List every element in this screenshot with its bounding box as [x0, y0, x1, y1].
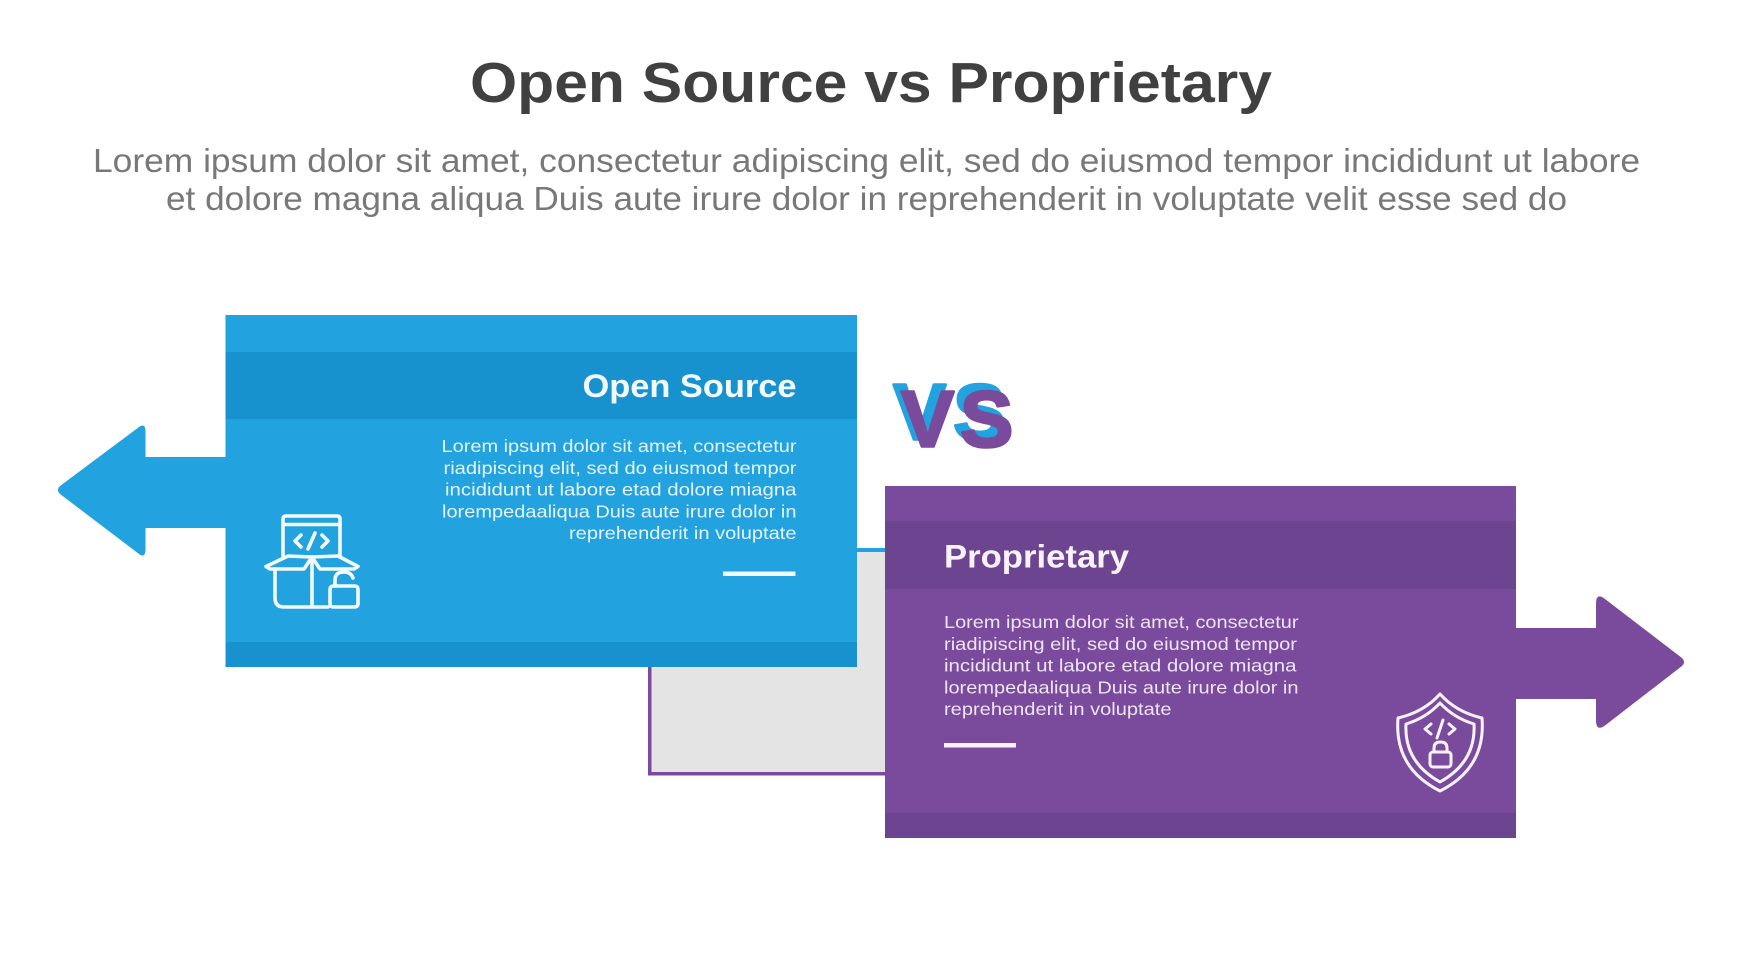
vs badge: [893, 368, 1013, 464]
panel: open source: [226, 315, 857, 667]
heading band: [885, 521, 1516, 589]
vs shadow letters: S: [953, 368, 1006, 456]
accent rule: [723, 572, 796, 576]
body text: lorempedaaliqua Duis aute irure dolor in: [944, 678, 1298, 698]
body text: Lorem ipsum dolor sit amet, consectetur: [442, 436, 797, 456]
heading: open source: Open Source: [582, 368, 796, 404]
panel: proprietary: [885, 486, 1516, 838]
body text: [442, 436, 797, 543]
vs shadow letters: V: [893, 368, 946, 456]
arrow: left blue: [58, 425, 228, 556]
icon: shield with code and lock: [1398, 694, 1482, 791]
subtitle text block: [93, 142, 1640, 217]
body text: reprehenderit in voluptate: [569, 523, 796, 543]
connector box behind panels: [648, 548, 888, 776]
body text: Lorem ipsum dolor sit amet, consectetur: [944, 612, 1299, 632]
arrow: right purple: [1514, 596, 1684, 728]
body text: [944, 612, 1299, 719]
vs front letters: V: [901, 374, 954, 464]
icon: open source box with code and open lock: [266, 516, 358, 607]
accent rule: [944, 743, 1016, 748]
bottom band: [885, 813, 1516, 838]
body text: incididunt ut labore etad dolore miagna: [944, 656, 1297, 676]
title: Open Source vs Proprietary: [470, 51, 1272, 115]
panel background: [226, 315, 857, 667]
body text: reprehenderit in voluptate: [944, 699, 1172, 719]
heading: proprietary: Proprietary: [944, 538, 1129, 574]
bottom band: [226, 642, 857, 667]
heading band: [226, 352, 857, 419]
body text: lorempedaaliqua Duis aute irure dolor in: [442, 502, 796, 522]
subtitle text block: Lorem ipsum dolor sit amet, consectetur adipiscing elit, sed do eiusmod tempor incididunt ut labore: [93, 142, 1640, 179]
panel background: [885, 486, 1516, 838]
body text: riadipiscing elit, sed do eiusmod tempor: [944, 634, 1297, 654]
body text: riadipiscing elit, sed do eiusmod tempor: [444, 458, 797, 478]
vs front letters: S: [960, 374, 1013, 464]
subtitle text block: et dolore magna aliqua Duis aute irure dolor in reprehenderit in voluptate velit esse sed do: [166, 180, 1567, 217]
body text: incididunt ut labore etad dolore miagna: [445, 480, 797, 500]
